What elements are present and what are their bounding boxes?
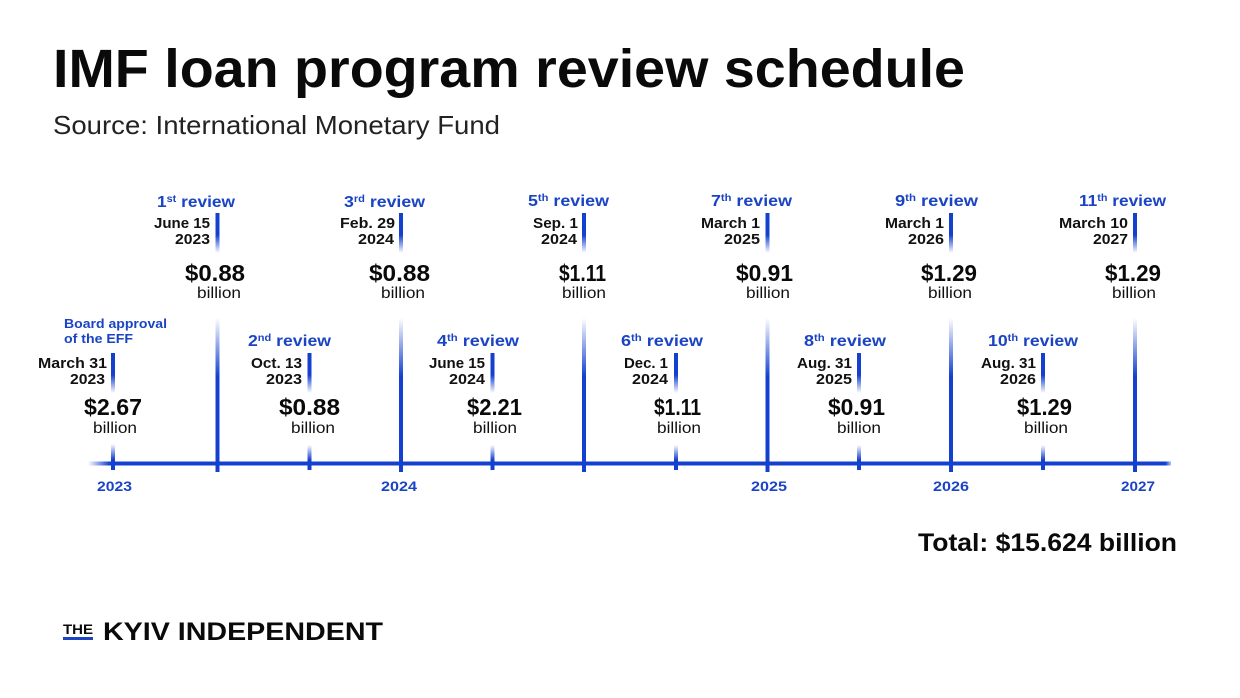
milestone: 1st review: st [167,194,177,205]
milestone: board approval: $2.67 [84,394,142,420]
milestone: 10th review: Aug. 31 [981,355,1036,372]
milestone: 8th review: review [825,333,887,350]
logo: The Kyiv Independent: KYIV INDEPENDENT [103,618,383,646]
milestone: 8th review: $0.91 [828,394,885,420]
total: Total: $15.624 billion [918,529,1177,557]
milestone: 3rd review: 3 [344,194,353,211]
milestone: 11th review: 2027 [1093,231,1128,248]
milestone: 11th review: review [1107,193,1167,210]
milestone: 2nd review: 2 [248,333,257,350]
logo: The Kyiv Independent: THE [63,621,93,637]
milestone: 1st review: 1 [157,194,166,211]
milestone: 11th review: March 10 [1059,215,1128,232]
milestone: 8th review: th [814,333,825,344]
milestone: 5th review: 5 [528,193,537,210]
milestone: 4th review: 2024 [449,371,486,388]
milestone: 11th review [1059,193,1167,302]
milestone: 2nd review: review [271,333,332,350]
milestone: 10th review: review [1018,333,1079,350]
milestone: 8th review [797,333,887,437]
milestone: 1st review: 2023 [175,231,210,248]
milestone: 11th review: th [1097,193,1107,204]
milestone: 5th review [528,193,610,302]
milestone: 1st review: review [176,194,236,211]
long vertical connectors [216,318,1137,472]
milestone: 9th review: billion [928,285,972,302]
milestone: 3rd review: 2024 [358,231,395,248]
milestone: 6th review: billion [657,420,701,437]
milestone: 3rd review: $0.88 [369,260,430,286]
milestone: 9th review: 9 [895,193,904,210]
year labels: 2025 [751,478,787,494]
timeline axis [88,462,1171,466]
milestone: 9th review: $1.29 [921,260,977,286]
title: IMF loan program review schedule [53,39,965,99]
milestone: 5th review: 2024 [541,231,578,248]
milestone: board approval: March 31 [38,355,107,372]
milestone: 4th review [429,333,522,437]
milestone: 6th review: Dec. 1 [624,355,668,372]
milestone: 11th review: 11 [1079,193,1096,210]
milestone: 6th review: $1.11 [654,394,701,420]
milestone: 8th review: billion [837,420,881,437]
milestone: 10th review: $1.29 [1017,394,1072,420]
milestone: 4th review: billion [473,420,517,437]
milestone: 4th review: review [458,333,520,350]
milestone: 2nd review: nd [258,333,271,344]
milestone: 1st review: billion [197,285,241,302]
milestone: 5th review: billion [562,285,606,302]
milestone: 7th review: 7 [711,193,720,210]
milestone: 5th review: $1.11 [559,260,606,286]
milestone: 6th review: 6 [621,333,630,350]
year labels: 2023 [97,478,132,494]
milestone: 3rd review: review [365,194,426,211]
milestone: 9th review [885,193,979,302]
milestone: 2nd review: Oct. 13 [251,355,302,372]
milestone: 9th review: th [905,193,916,204]
milestone: 4th review: th [447,333,458,344]
milestone: 10th review: 10 [988,333,1006,350]
milestone: 7th review: 2025 [724,231,760,248]
milestone: 11th review: $1.29 [1105,260,1161,286]
milestone: 7th review: $0.91 [736,260,793,286]
milestone: 3rd review [340,194,430,302]
timeline chart [38,193,1171,494]
milestone: 10th review [981,333,1079,437]
year labels: 2026 [933,478,969,494]
milestone: 5th review: review [548,193,610,210]
milestone: board approval [38,316,167,437]
milestone: 7th review: March 1 [701,215,760,232]
milestone: 3rd review: rd [354,194,365,205]
milestone: 4th review: June 15 [429,355,485,372]
milestone: 6th review: th [631,333,642,344]
milestone: 8th review: Aug. 31 [797,355,852,372]
milestone: 2nd review: billion [291,420,335,437]
milestone: board approval: 2023 [70,371,105,388]
milestone: board approval: Board approval [64,316,167,331]
milestone: 10th review: 2026 [1000,371,1036,388]
milestone: board approval: billion [93,420,137,437]
milestone: 8th review: 2025 [816,371,852,388]
milestone: 7th review: review [731,193,793,210]
milestone: 10th review: billion [1024,420,1068,437]
milestone: 2nd review [248,333,340,437]
milestone: 8th review: 8 [804,333,813,350]
year labels [97,478,1155,494]
milestone: 2nd review: 2023 [266,371,302,388]
year labels: 2024 [381,478,417,494]
milestone: 6th review: review [642,333,704,350]
milestone: 10th review: th [1008,333,1018,344]
milestone: 2nd review: $0.88 [279,394,340,420]
milestone: 1st review: June 15 [154,215,210,232]
milestone: 7th review [701,193,793,302]
milestone: 1st review: $0.88 [185,260,245,286]
milestone: 7th review: th [721,193,731,204]
milestone: 9th review: March 1 [885,215,944,232]
milestone: 4th review: 4 [437,333,446,350]
milestone: 6th review [621,333,704,437]
milestone: 3rd review: Feb. 29 [340,215,395,232]
milestone: 5th review: th [538,193,548,204]
milestone: 9th review: review [916,193,979,210]
milestone: 11th review: billion [1112,285,1156,302]
year labels: 2027 [1121,478,1155,494]
milestone: board approval: of the EFF [64,331,133,346]
milestone: 3rd review: billion [381,285,425,302]
milestone: 9th review: 2026 [908,231,944,248]
milestone: 4th review: $2.21 [467,394,522,420]
short axis ticks [111,444,1045,470]
milestone: 7th review: billion [746,285,790,302]
subtitle: source: Source: International Monetary Fund [53,110,500,140]
milestone: 6th review: 2024 [632,371,669,388]
milestone: 5th review: Sep. 1 [533,215,578,232]
milestone: 1st review [154,194,245,302]
